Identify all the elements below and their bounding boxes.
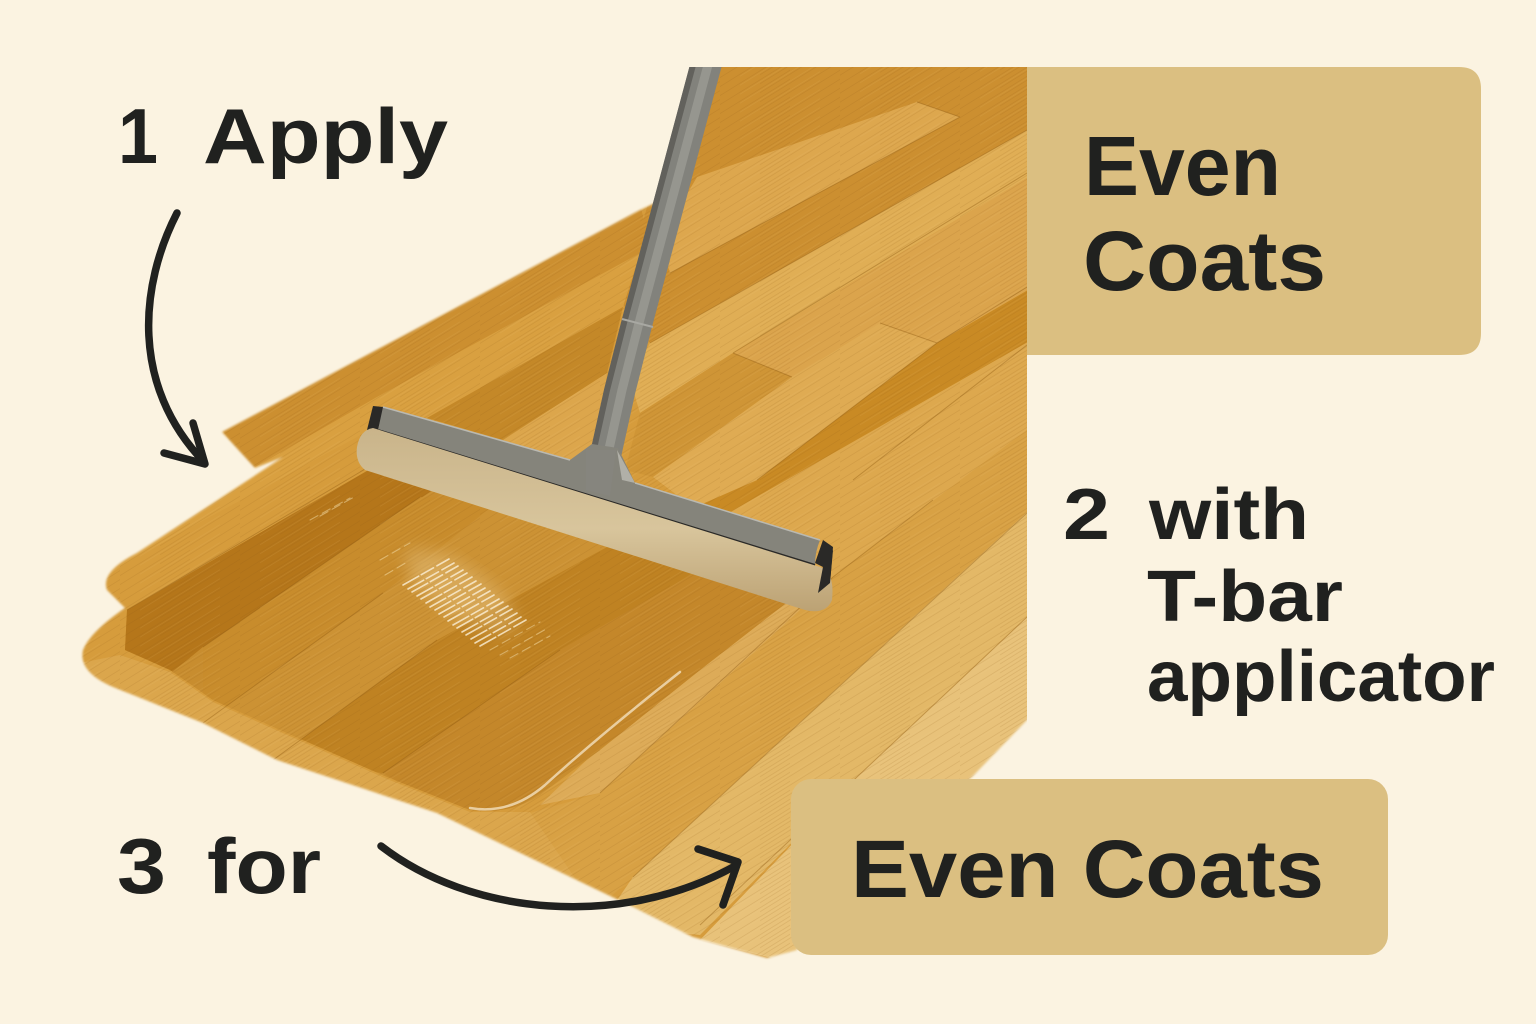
glossy highlight streaks [310, 496, 550, 658]
heading: Even Coats top: Coats [1083, 214, 1326, 308]
handle [592, 67, 722, 455]
panel: even coats bottom [791, 779, 1388, 955]
glossy wet edge [470, 672, 680, 809]
step 1 label: Apply [203, 92, 448, 180]
step 1 label [118, 92, 448, 180]
heading: Even Coats top: Even [1084, 119, 1281, 213]
metal bar [378, 407, 820, 565]
panel: even coats top [1027, 67, 1481, 355]
step 2 label: T-bar [1147, 557, 1343, 637]
step 3 label: for [207, 822, 321, 910]
T-bar applicator [357, 50, 833, 611]
bar end caps [367, 406, 384, 430]
step 2 label: with [1148, 475, 1309, 555]
heading: Even Coats bottom: Even Coats [851, 824, 1324, 915]
step 2 label: 2 [1063, 475, 1110, 555]
arrow: for to even coats [381, 846, 738, 907]
wood floor with planks [60, 50, 1060, 970]
step 3 label: 3 [117, 822, 166, 910]
heading: Even Coats top [1083, 119, 1326, 308]
arrow: apply to floor [149, 213, 205, 464]
step 2 label [1063, 475, 1495, 717]
step 2 label: applicator [1147, 637, 1495, 717]
foam roller [357, 428, 832, 611]
step 3 label [117, 822, 321, 910]
step 1 label: 1 [118, 92, 158, 180]
